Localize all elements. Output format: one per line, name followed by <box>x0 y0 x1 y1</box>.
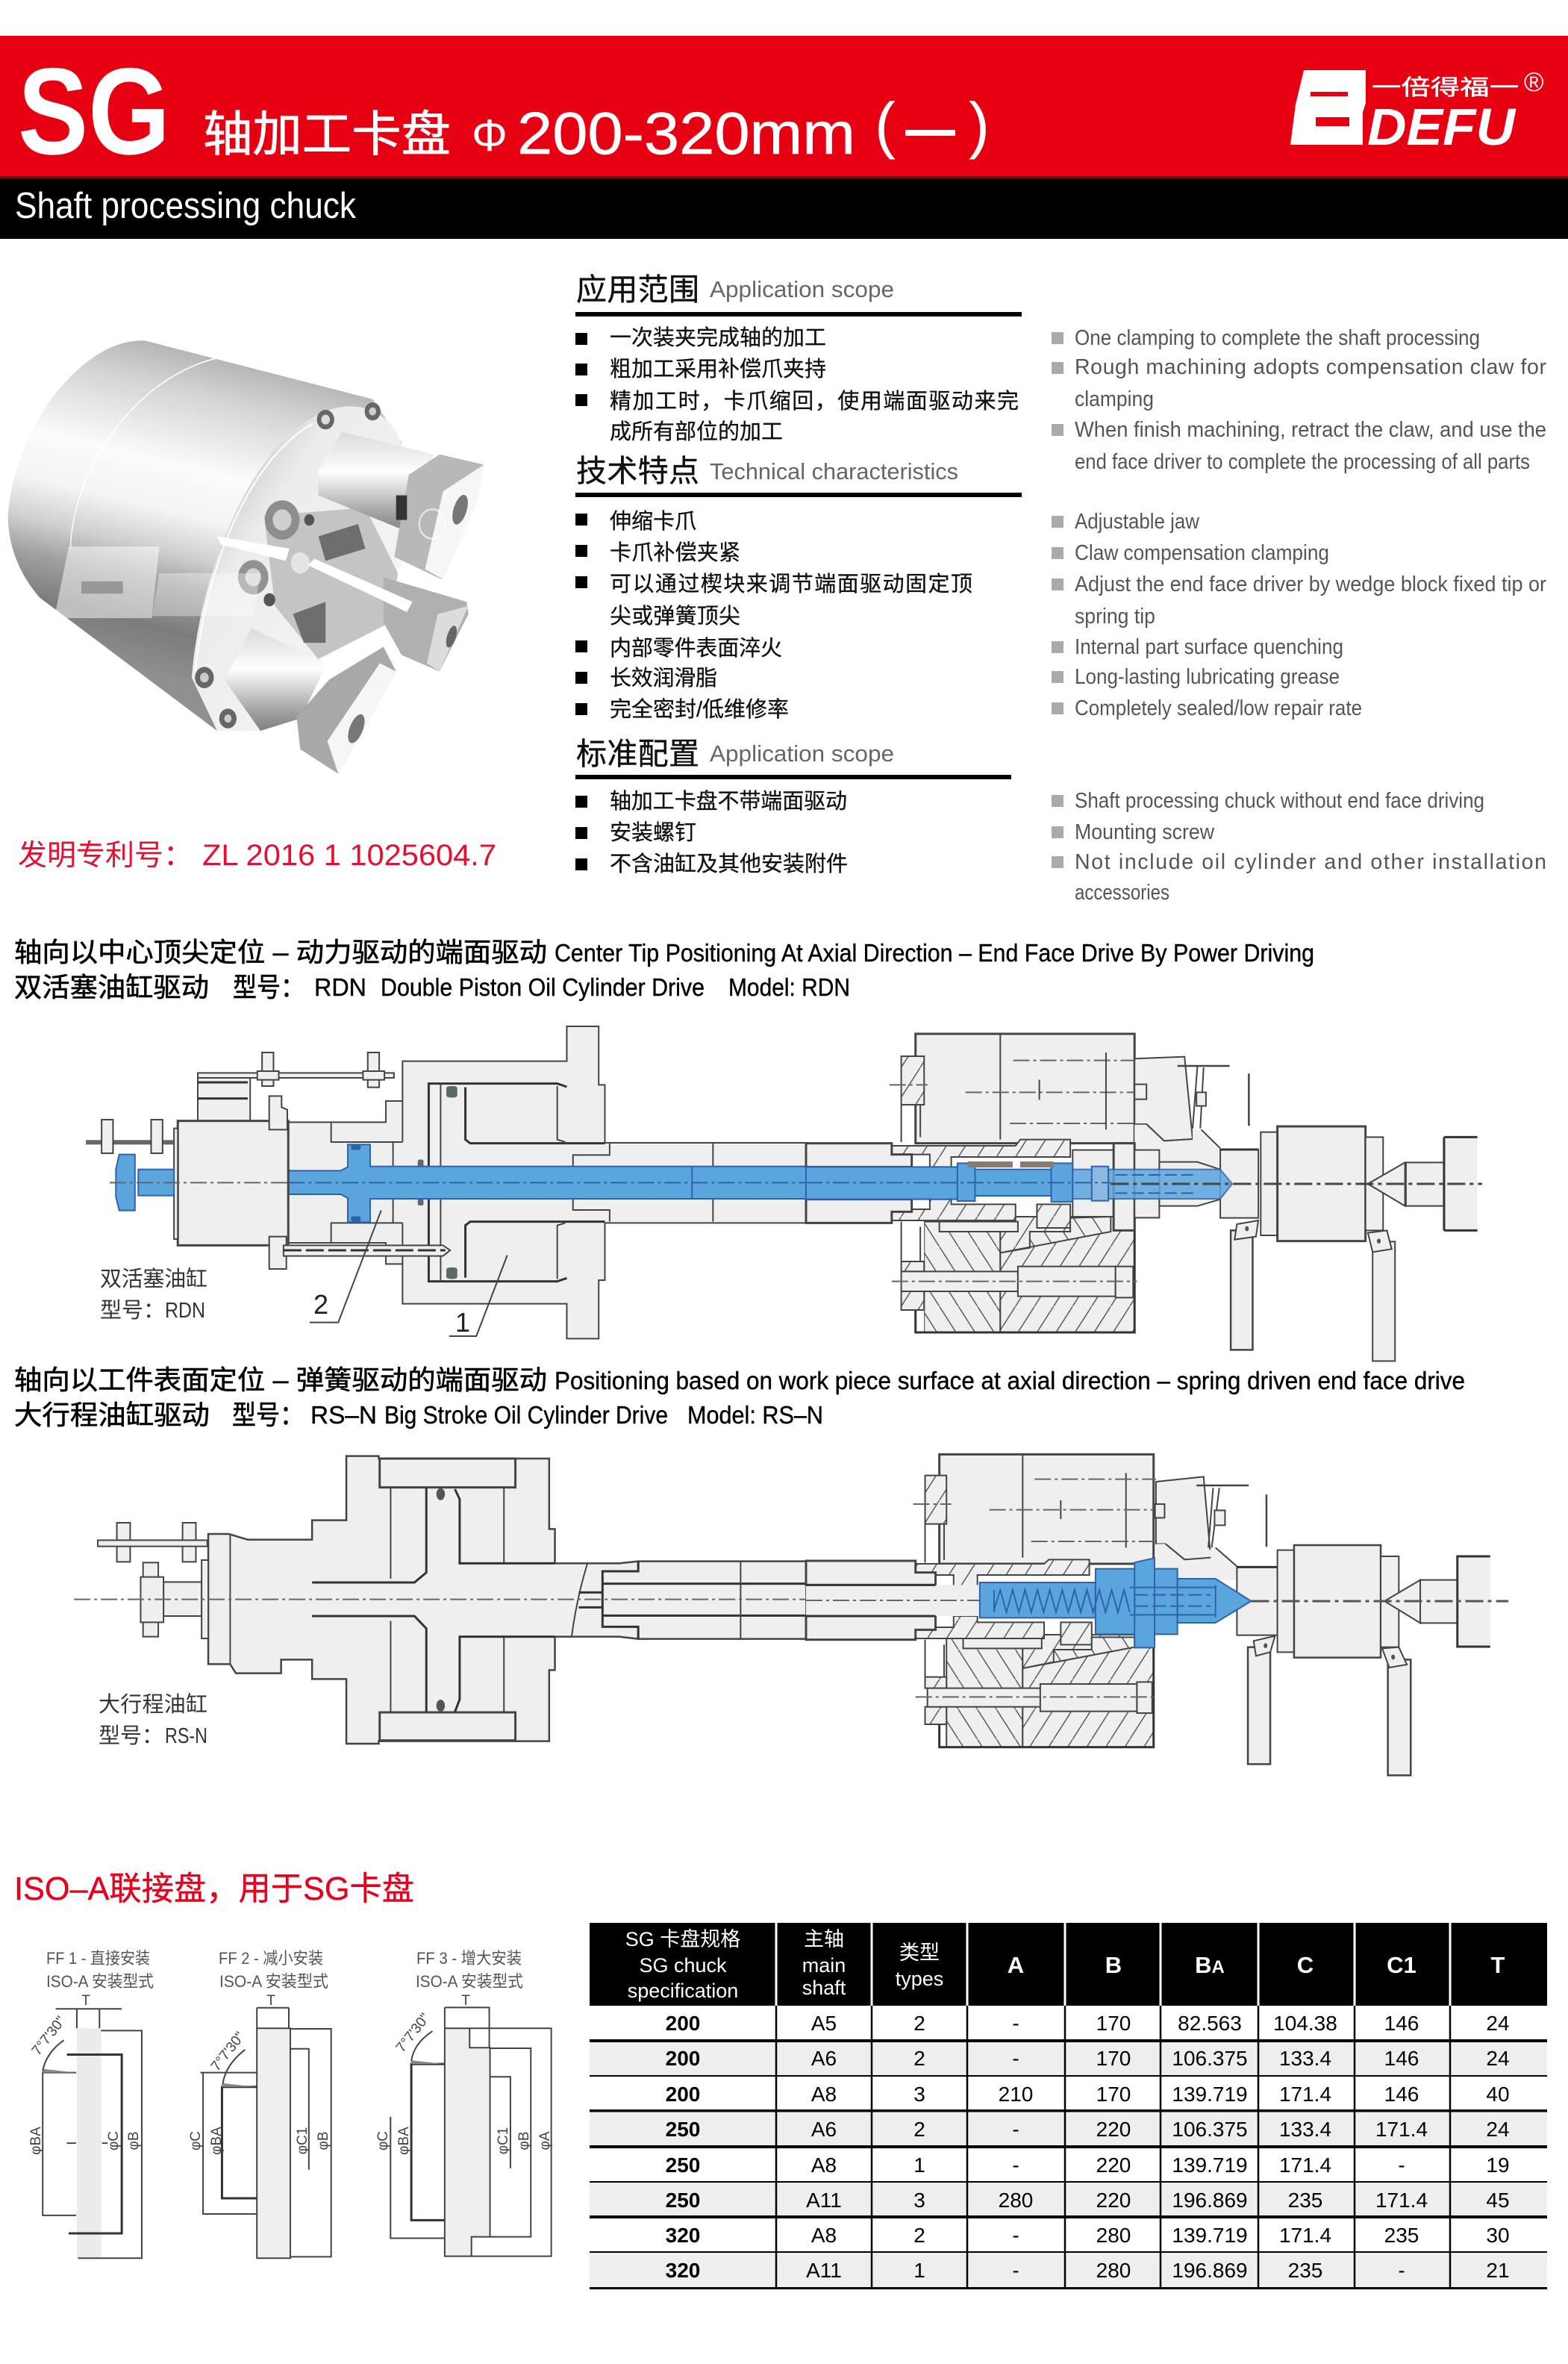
technical drawing: double piston cylinder RDN <box>86 1026 1482 1361</box>
row 7: 280 <box>1096 2224 1131 2247</box>
workpiece <box>1278 1550 1294 1652</box>
text: standard configuration English: accessories <box>1075 881 1169 905</box>
row 2: A6 <box>811 2047 837 2070</box>
jaw two <box>225 629 328 731</box>
cylinder left side <box>74 1456 806 1744</box>
row 8: A11 <box>806 2259 842 2282</box>
row 8: 235 <box>1288 2259 1322 2282</box>
row 7: 2 <box>913 2224 925 2247</box>
table header: SG chuck <box>639 1954 727 1977</box>
row 4: 24 <box>1486 2118 1510 2141</box>
diagram: FF3: φA <box>537 2131 553 2150</box>
row 3 <box>666 2083 1510 2106</box>
label: RDN cylinder <box>100 1267 207 1323</box>
row 6: 280 <box>999 2189 1033 2212</box>
title: diameter range <box>472 90 990 166</box>
centre line <box>74 1599 806 1600</box>
heading: ISO-A adapter plate: ISO–A联接盘，用于SG卡盘 <box>14 1871 414 1907</box>
row 8: 21 <box>1486 2259 1510 2282</box>
text: standard configuration English: Mounting screw <box>1075 820 1214 844</box>
bullet list: 卡爪补偿夹紧 <box>610 540 740 565</box>
diagram: FF3: T <box>461 1993 470 2009</box>
row 4: 133.4 <box>1279 2118 1331 2141</box>
heading: standard configuration: 标准配置 <box>576 737 699 771</box>
chuck upper <box>916 1034 1134 1144</box>
heading: RS-N drive: 大行程油缸驱动 <box>14 1400 210 1430</box>
bullet list: 长效润滑脂 <box>610 666 717 690</box>
chuck upper <box>940 1454 1154 1564</box>
bullet list: 内部零件表面淬火 <box>610 636 782 661</box>
row 3: 171.4 <box>1279 2083 1331 2106</box>
heading: RS-N drive: Big Stroke Oil Cylinder Drive <box>384 1401 668 1429</box>
cylinder block <box>178 1121 288 1245</box>
panel: English feature lists <box>1052 326 1546 905</box>
row 3: 139.719 <box>1172 2083 1248 2106</box>
blue spring tip <box>980 1582 1096 1618</box>
row 6: 45 <box>1486 2189 1510 2212</box>
text: technical characteristics English <box>1075 510 1546 720</box>
row 5: - <box>1398 2154 1405 2177</box>
bolt <box>284 1245 450 1256</box>
diagram: FF1: T <box>81 1993 90 2009</box>
label: RS-N cylinder: 大行程油缸 <box>99 1692 207 1717</box>
row 5: 1 <box>913 2154 925 2177</box>
diagram: FF3: 7°7'30" <box>393 2010 433 2056</box>
diagram: FF1: 7°7'30" <box>29 2013 69 2059</box>
text: application scope English: Rough machining adopts compensation claw for <box>1075 355 1546 379</box>
heading: RDN drive: RDN <box>314 973 366 1001</box>
bullet list: 尖或弹簧顶尖 <box>610 604 740 629</box>
row 2: 106.375 <box>1172 2047 1248 2070</box>
table header: C <box>1297 1952 1314 1978</box>
table header: B <box>1105 1952 1122 1978</box>
row 8: - <box>1398 2259 1405 2282</box>
chuck right side <box>806 1454 1508 1775</box>
lower chuck hatching <box>924 1222 1000 1332</box>
centre line <box>110 1182 288 1183</box>
lower chuck hatching <box>946 1637 1022 1747</box>
jaw one <box>319 432 434 532</box>
row 3: 3 <box>913 2083 925 2106</box>
table header: 主轴 <box>804 1928 844 1950</box>
text: technical characteristics English: spring tip <box>1075 605 1155 629</box>
panel: ISO-A mounting diagrams <box>28 1949 553 2258</box>
table header: SG 卡盘规格 <box>625 1928 740 1950</box>
logo: BDEFU: 一倍得福一 <box>1372 75 1519 100</box>
logo: BDEFU: DEFU <box>1367 98 1516 156</box>
diagram: FF3: ISO-A 安装型式 <box>416 1972 523 1991</box>
heading: RDN drive: Double Piston Oil Cylinder Drive <box>381 973 705 1001</box>
workpiece <box>1261 1132 1278 1235</box>
table header: shaft <box>802 1977 846 1999</box>
heading: RS-N drive: 轴向以工件表面定位 – 弹簧驱动的端面驱动 <box>14 1365 547 1395</box>
row 8: 320 <box>666 2259 700 2282</box>
diagram: FF2: T <box>266 1993 275 2009</box>
diagram: FF3: φC <box>375 2131 391 2151</box>
chuck body <box>8 340 402 731</box>
left rod and disc <box>163 1582 202 1616</box>
heading: technical characteristics: Technical characteristics <box>710 458 958 484</box>
panel: standard configuration (Chinese) <box>575 737 1011 876</box>
row 6: 235 <box>1288 2189 1322 2212</box>
text: technical characteristics English: Internal part surface quenching <box>1075 635 1343 659</box>
row 1 <box>666 2012 1510 2035</box>
row 2: 146 <box>1384 2047 1419 2070</box>
subtitle: Shaft processing chuck <box>15 186 356 226</box>
heading: technical characteristics <box>575 454 1022 497</box>
row 6: 3 <box>913 2189 925 2212</box>
panel: application scope (Chinese) <box>575 272 1022 444</box>
row 2: 200 <box>666 2047 700 2070</box>
diagram: FF3: φB <box>516 2132 532 2150</box>
diagram: FF2 <box>188 1949 331 2258</box>
row 6: 196.869 <box>1172 2189 1248 2212</box>
row 5: A8 <box>811 2154 837 2177</box>
heading: application scope: 应用范围 <box>576 272 699 307</box>
diagram: FF2: 7°7'30" <box>208 2029 248 2074</box>
table header: T <box>1491 1952 1505 1978</box>
jaw <box>1134 1057 1193 1141</box>
label: part number 1: 1 <box>455 1307 470 1338</box>
row 8 <box>666 2259 1510 2282</box>
product photo: chuck <box>8 340 484 774</box>
bullet list: 精加工时，卡爪缩回，使用端面驱动来完 <box>610 389 1019 414</box>
watermark <box>54 546 159 618</box>
row 4: 171.4 <box>1375 2118 1428 2141</box>
housing silhouette <box>288 1026 806 1338</box>
hatched sleeve <box>916 1559 1090 1586</box>
jaw three <box>384 577 469 671</box>
text: technical characteristics English: Adjustable jaw <box>1075 510 1199 534</box>
row 6: 220 <box>1096 2189 1131 2212</box>
hatched sleeve <box>892 1140 1070 1167</box>
front block behind tip <box>1237 1567 1278 1635</box>
text: application scope English: When finish machining, retract the claw, and use the <box>1075 418 1546 442</box>
diagram: FF3 <box>375 1949 553 2257</box>
diagram: FF1: φB <box>126 2132 142 2150</box>
diagram: FF2: φBA <box>209 2127 225 2155</box>
heading: application scope <box>575 272 1022 316</box>
bullet list: 伸缩卡爪 <box>610 509 696 534</box>
row 1: A5 <box>811 2012 837 2035</box>
blue rod and tip <box>806 1167 958 1200</box>
patent number <box>18 839 496 872</box>
heading: RDN drive: 轴向以中心顶尖定位 – 动力驱动的端面驱动 <box>14 937 547 967</box>
row 5: 139.719 <box>1172 2154 1248 2177</box>
row 2: 133.4 <box>1279 2047 1331 2070</box>
row 7 <box>666 2224 1510 2247</box>
leader lines <box>310 1211 381 1323</box>
chuck face <box>192 406 402 731</box>
row 1: 2 <box>913 2012 925 2035</box>
bullet list: 完全密封/低维修率 <box>610 697 789 722</box>
row 2 <box>666 2047 1510 2070</box>
diagram: FF2: FF 2 - 减小安装 <box>219 1949 323 1968</box>
cylinder left side <box>86 1026 806 1338</box>
bullet list: 安装螺钉 <box>610 820 696 845</box>
row 3: 146 <box>1384 2083 1419 2106</box>
heading: application scope: Application scope <box>710 276 894 302</box>
bullet list: 不含油缸及其他安装附件 <box>610 852 848 876</box>
chuck right side <box>806 1034 1482 1361</box>
label: RS-N cylinder: 型号： <box>99 1724 163 1748</box>
diagram: FF2: φC <box>188 2131 204 2151</box>
heading: RS-N drive <box>14 1365 1465 1430</box>
row 1: 82.563 <box>1178 2012 1242 2035</box>
bullets: English lists <box>1052 332 1063 868</box>
blue piston rod <box>288 1144 806 1222</box>
bullet list: 成所有部位的加工 <box>610 420 783 444</box>
row 1: 104.38 <box>1273 2012 1337 2035</box>
text: application scope English: end face driver to complete the processing of all parts <box>1075 450 1530 474</box>
centre mechanism <box>264 508 398 659</box>
row 2: 24 <box>1486 2047 1510 2070</box>
heading: RS-N drive: Positioning based on work piece surface at axial direction – spring driven end face drive <box>555 1367 1465 1394</box>
row 1: 200 <box>666 2012 700 2035</box>
text: application scope English: clamping <box>1075 387 1154 411</box>
bullet list: 可以通过楔块来调节端面驱动固定顶 <box>610 572 972 596</box>
heading: technical characteristics: 技术特点 <box>576 454 699 488</box>
row 3: 210 <box>999 2083 1033 2106</box>
patent number: 发明专利号： <box>18 840 193 872</box>
table header: BA <box>1195 1952 1225 1978</box>
row 2: 2 <box>913 2047 925 2070</box>
row 3: 200 <box>666 2083 700 2106</box>
label: RDN cylinder: 双活塞油缸 <box>100 1267 207 1291</box>
label: RDN cylinder: 型号： <box>100 1298 165 1323</box>
diagram: FF1: FF 1 - 直接安装 <box>46 1949 150 1968</box>
row 4: A6 <box>811 2118 837 2141</box>
label: RDN cylinder: RDN <box>165 1299 205 1323</box>
row 2: 170 <box>1096 2047 1131 2070</box>
row 7: A8 <box>811 2224 837 2247</box>
title: diameter range: Φ <box>472 110 507 160</box>
bullet list <box>575 509 972 722</box>
heading: RDN drive: Model: RDN <box>728 973 850 1001</box>
row 6: 250 <box>666 2189 700 2212</box>
shaft end <box>806 1561 936 1640</box>
text: application scope English: One clamping to complete the shaft processing <box>1075 326 1480 350</box>
section lines <box>230 1488 504 1712</box>
row 8: - <box>1012 2259 1019 2282</box>
jaw <box>1156 1476 1211 1559</box>
title: SG: SG <box>18 43 170 180</box>
row 2: - <box>1012 2047 1019 2070</box>
bullet list <box>575 325 1019 444</box>
row 4 <box>666 2118 1510 2141</box>
label: part number 2: 2 <box>313 1289 328 1320</box>
row 5: 220 <box>1096 2154 1131 2177</box>
label: RS-N cylinder <box>99 1692 207 1748</box>
diagram: FF1 <box>28 1949 154 2258</box>
heading: RS-N drive: Model: RS–N <box>687 1401 823 1429</box>
technical drawing: big stroke cylinder RS-N <box>74 1454 1508 1775</box>
text: application scope English <box>1075 326 1546 474</box>
row 3: 40 <box>1486 2083 1510 2106</box>
logo: BDEFU <box>1290 66 1544 156</box>
row 8: 280 <box>1096 2259 1131 2282</box>
internal section lines <box>331 1084 713 1167</box>
diagram: FF1: ISO-A 安装型式 <box>46 1972 154 1991</box>
header banner <box>0 36 1568 239</box>
row 1: 146 <box>1384 2012 1419 2035</box>
inner blocks <box>380 1459 516 1488</box>
table header: 类型 <box>899 1942 940 1964</box>
title: shaft chuck name: 轴加工卡盘 <box>203 107 451 161</box>
diagram: FF3: FF 3 - 增大安装 <box>416 1949 522 1968</box>
diagram: FF1: φC <box>106 2131 122 2151</box>
row 5: - <box>1012 2154 1019 2177</box>
diagram: FF2: φC1 <box>295 2127 310 2154</box>
row 4: 2 <box>913 2118 925 2141</box>
row 5 <box>666 2154 1510 2177</box>
panel: technical characteristics (Chinese) <box>575 454 1022 722</box>
row 3: 170 <box>1096 2083 1131 2106</box>
bracket and rod <box>198 1073 250 1121</box>
row 7: 235 <box>1384 2224 1419 2247</box>
row 4: 220 <box>1096 2118 1131 2141</box>
cutting tools <box>1231 1230 1252 1350</box>
housing silhouette <box>208 1456 806 1744</box>
row 5: 171.4 <box>1279 2154 1331 2177</box>
row 7: 320 <box>666 2224 700 2247</box>
diagram: FF2: ISO-A 安装型式 <box>219 1972 328 1991</box>
table header: types <box>896 1968 943 1990</box>
threaded bar and bolts <box>117 1523 130 1562</box>
diagram: FF1: φBA <box>28 2127 44 2155</box>
row 4: 250 <box>666 2118 700 2141</box>
text: standard configuration English: Not include oil cylinder and other installation <box>1075 850 1546 874</box>
row 6: 171.4 <box>1375 2189 1428 2212</box>
heading: RDN drive: Center Tip Positioning At Axial Direction – End Face Drive By Power Driving <box>555 939 1314 967</box>
row 5: 19 <box>1486 2154 1510 2177</box>
row 6 <box>666 2189 1510 2212</box>
row 5: 250 <box>666 2154 700 2177</box>
row 1: 170 <box>1096 2012 1131 2035</box>
logo: BDEFU: ® <box>1524 66 1544 97</box>
bullet list: 粗加工采用补偿爪夹持 <box>610 357 826 381</box>
row 4: 106.375 <box>1172 2118 1248 2141</box>
patent number: ZL 2016 1 1025604.7 <box>202 839 496 872</box>
diagram: FF3: φC1 <box>496 2127 511 2154</box>
row 7: - <box>1012 2224 1019 2247</box>
text: technical characteristics English: Adjust the end face driver by wedge block fixed tip or <box>1075 573 1546 596</box>
bullet list: 一次装夹完成轴的加工 <box>610 325 826 350</box>
text: standard configuration English <box>1075 789 1546 905</box>
heading: RS-N drive: 型号： <box>232 1400 304 1430</box>
threaded rod and blue end disc <box>86 1140 174 1144</box>
title: diameter range: ) <box>969 90 990 160</box>
table header <box>590 1923 1547 2006</box>
diagram: FF3: φBA <box>396 2127 412 2155</box>
row 8: 196.869 <box>1172 2259 1248 2282</box>
row 4: - <box>1012 2118 1019 2141</box>
specification table <box>590 1923 1547 2289</box>
table header: main <box>802 1954 846 1977</box>
table header: A <box>1008 1952 1024 1978</box>
centre blocks <box>1072 1150 1113 1217</box>
shaft end <box>806 1144 912 1223</box>
text: technical characteristics English: Long-lasting lubricating grease <box>1075 665 1340 689</box>
row 3: A8 <box>811 2083 837 2106</box>
bullet list <box>575 789 848 876</box>
table stripes and rules <box>590 2006 1547 2289</box>
text: technical characteristics English: Claw compensation clamping <box>1075 541 1329 565</box>
heading: standard configuration: Application scope <box>710 740 894 767</box>
heading: RDN drive <box>14 937 1314 1002</box>
row 7: 139.719 <box>1172 2224 1248 2247</box>
row 7: 30 <box>1486 2224 1510 2247</box>
cutting tools <box>1248 1647 1270 1764</box>
heading: standard configuration <box>575 737 1011 779</box>
title: diameter range: ( <box>875 90 896 160</box>
bullet list: 轴加工卡盘不带端面驱动 <box>610 789 847 814</box>
row 1: - <box>1012 2012 1019 2035</box>
title: diameter range: 200-320mm <box>517 100 855 166</box>
row 8: 1 <box>913 2259 925 2282</box>
text: technical characteristics English: Completely sealed/low repair rate <box>1075 696 1362 720</box>
heading: RDN drive: 型号： <box>233 972 304 1002</box>
diagram: FF2: φB <box>316 2132 331 2150</box>
table header: specification <box>628 1980 738 2002</box>
heading: RS-N drive: RS–N <box>310 1401 377 1429</box>
row 1: 24 <box>1486 2012 1510 2035</box>
row 7: 171.4 <box>1279 2224 1331 2247</box>
row 6: A11 <box>806 2189 842 2212</box>
table header: C1 <box>1387 1952 1416 1978</box>
label: RS-N cylinder: RS-N <box>165 1724 207 1748</box>
heading: RDN drive: 双活塞油缸驱动 <box>14 972 209 1002</box>
text: standard configuration English: Shaft processing chuck without end face driving <box>1075 789 1484 813</box>
